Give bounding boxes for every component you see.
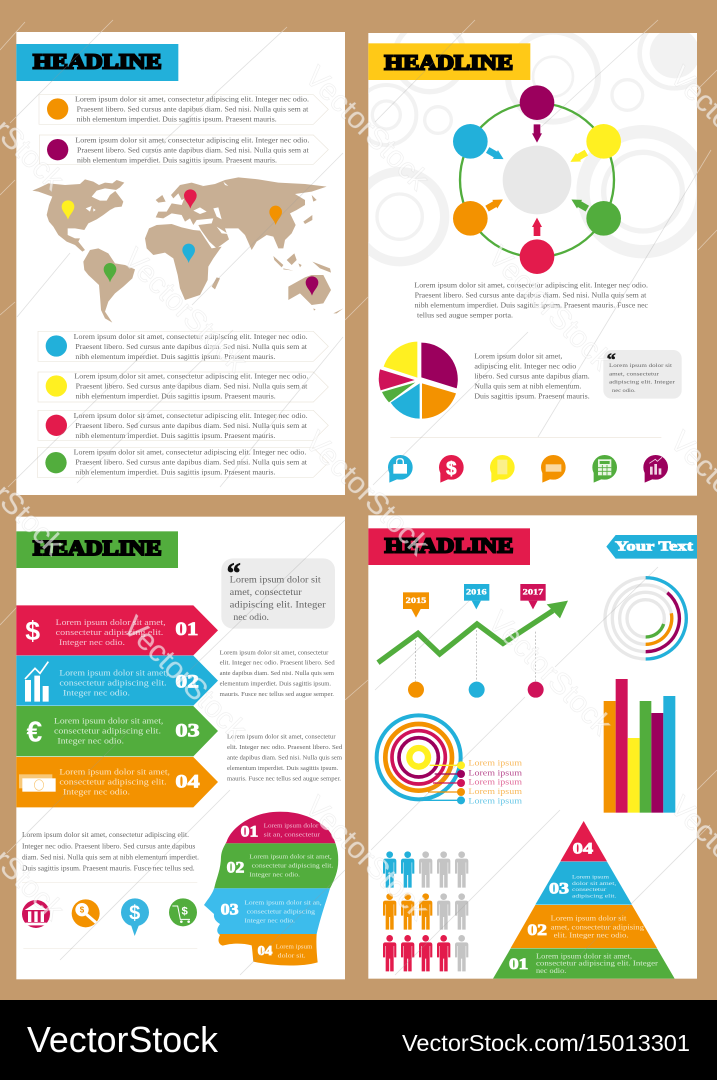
text block: pie description: Nulla quis sem at nibh elementum. [474, 382, 582, 390]
chart: bars [604, 679, 675, 813]
watermark text: VectorStock [298, 425, 436, 562]
arrow banner 02: consectetur adipiscing elit. [59, 678, 167, 687]
chart: pyramid: consectetur [572, 887, 606, 893]
arrow banner 04: 04 [175, 772, 200, 793]
text block: left description: diam. Sed nisi. Nulla quis sem at nibh elementum imperdiet. [22, 854, 199, 862]
chart: concentric target with legend: Lorem ipsum [468, 767, 522, 777]
arrow banner 02 [16, 656, 218, 706]
icon: magnifier with dollar [72, 899, 100, 927]
icon: calculator [592, 455, 617, 483]
callout: yellow item [38, 372, 328, 402]
callout: orange item: Lorem ipsum dolor sit amet, consectetur adipiscing elit. Integer nec odio. [75, 96, 309, 104]
chart: head silhouette: dolor sit. [278, 953, 306, 959]
callout: quote box: “ [607, 350, 616, 370]
callout: quote box: Lorem ipsum dolor sit [609, 363, 673, 369]
arrow banner 04: consectetur adipiscing elit. [59, 778, 167, 787]
arrow banner 03 [16, 706, 218, 756]
callout: purple item: nibh elementum imperdiet. Duis sagittis ipsum. Praesent mauris. [77, 156, 277, 164]
chart: head silhouette: Lorem ipsum [276, 945, 313, 951]
chart: pyramid: adipiscing elit. [572, 893, 617, 899]
chart: head silhouette: 02 [227, 859, 244, 876]
callout: quote box: nec odio. [233, 612, 269, 622]
text block: left description [22, 831, 199, 873]
chart: head silhouette: Lorem ipsum dolor [264, 824, 318, 830]
arrow banner 02: Integer nec odio. [63, 688, 130, 697]
icon: bank [22, 900, 50, 928]
callout: green item: nibh elementum imperdiet. Duis sagittis ipsum. Praesent mauris. [75, 469, 276, 477]
arrow banner 04: Integer nec odio. [63, 788, 130, 797]
icon: shopping bag [388, 455, 413, 483]
chart: concentric target with legend: Lorem ipsum [468, 796, 522, 806]
watermark text: VectorStock [116, 242, 254, 379]
chart: head silhouette: Integer nec odio. [249, 872, 301, 878]
heading: yellow headline: HEADLINE [384, 50, 513, 74]
callout: quote box: adipiscing elit. Integer [230, 600, 326, 610]
text block: pie description: adipiscing elit. Integer nec odio [474, 363, 577, 371]
watermark text: VectorStock [298, 60, 436, 197]
icon: ticket [541, 455, 566, 483]
callout: orange item: nibh elementum imperdiet. Duis sagittis ipsum. Praesent mauris. [77, 116, 277, 124]
text block: right upper: elit. Integer nec odio. Praesent libero. Sed [220, 661, 335, 667]
chart: pyramid: elit. Integer nec odio. [554, 932, 629, 940]
chart: head silhouette: 04 [258, 943, 273, 958]
chart: head silhouette: consectetur adipiscing [247, 909, 315, 915]
text block: cycle description: Praesent libero. Sed cursus ante dapibus diam. Sed nisi. Nulla quis sem at [415, 291, 646, 299]
chart: pyramid: 04 [573, 840, 593, 857]
watermark text: VectorStock [481, 605, 619, 742]
callout: blue item: Praesent libero. Sed cursus ante dapibus diam. Sed nisi. Nulla quis sem at [75, 343, 307, 351]
chart: pyramid: 03 [549, 880, 569, 897]
heading: blue headline: HEADLINE [33, 49, 162, 73]
chart: head silhouette [204, 812, 338, 966]
callout: quote box [603, 350, 682, 399]
callout: green item [37, 448, 328, 477]
chart: timeline line arrow: 2016 [466, 588, 487, 597]
chart: head silhouette: Lorem ipsum dolor sit amet, [249, 854, 332, 860]
chart: timeline line arrow [378, 584, 568, 698]
arrow banner 02: Lorem ipsum dolor sit amet, [59, 668, 168, 677]
text block: right lower [227, 735, 342, 782]
decorative rings [368, 33, 697, 266]
heading: crimson headline [368, 528, 530, 565]
chart: timeline line arrow: 2017 [523, 588, 543, 597]
text block: cycle description [414, 281, 648, 319]
text block: left description: Integer nec odio. Praesent libero. Sed cursus ante dapibus [22, 842, 196, 850]
heading: yellow headline [368, 43, 530, 80]
chart: pyramid: Lorem ipsum [572, 875, 610, 881]
chart: concentric target with legend: Lorem ipsum [468, 758, 522, 768]
text block: pie description [474, 353, 590, 400]
text block: right lower: mauris. Fusce nec tellus sed augue semper. [227, 776, 342, 782]
callout: blue item [38, 331, 328, 361]
text block: right lower: elit. Integer nec odio. Praesent libero. Sed [227, 745, 342, 751]
callout: green item: Lorem ipsum dolor sit amet, consectetur adipiscing elit. Integer nec odio. [74, 449, 307, 457]
callout: yellow item: Lorem ipsum dolor sit amet, consectetur adipiscing elit. Integer nec odio. [74, 373, 309, 381]
panel: numbered arrows page [16, 517, 345, 979]
arrow banner 01 [16, 605, 218, 655]
arrow banner 03: Lorem ipsum dolor sit amet, [54, 717, 163, 726]
callout: blue item: Lorem ipsum dolor sit amet, consectetur adipiscing elit. Integer nec odio. [74, 333, 308, 341]
panel: charts page [368, 515, 697, 979]
icon: document [490, 455, 515, 483]
chart: pyramid: nec odio. [536, 967, 567, 975]
chart: world map with pins [32, 177, 343, 323]
callout: purple item [39, 135, 328, 164]
chart: concentric target with legend: Lorem ipsum [468, 786, 522, 796]
icon: dollar [439, 455, 464, 483]
heading: crimson headline: HEADLINE [385, 533, 513, 557]
text block: cycle description: nibh elementum imperdiet. Duis sagittis ipsum. Praesent mauris. Fusce nec [415, 301, 648, 309]
text block: pie description: libero. Sed cursus ante dapibus diam. [474, 372, 590, 380]
watermark text: VectorStock [298, 790, 436, 927]
footer bar [0, 1000, 717, 1080]
text block: right lower: ante dapibus diam. Sed nisi. Nulla quis sem [227, 756, 342, 762]
chart: pyramid: 02 [527, 922, 547, 939]
callout: crimson item: nibh elementum imperdiet. Duis sagittis ipsum. Praesent mauris. [75, 432, 276, 440]
chart: pyramid [493, 821, 675, 979]
arrow banner 03: 03 [175, 721, 200, 742]
arrow banner 01: 01 [175, 619, 198, 640]
chart: concentric target with legend [377, 715, 522, 806]
banner: your text: Your Text [615, 540, 693, 555]
footer bar: VectorStock.com/15013301 [402, 1030, 690, 1056]
arrow banner 02: 02 [175, 671, 199, 692]
arrow banner 01: $ [25, 616, 40, 646]
callout: yellow item: nibh elementum imperdiet. Duis sagittis ipsum. Praesent mauris. [76, 393, 276, 401]
arrow banner 04 [16, 757, 218, 807]
text block: left description: Duis sagittis ipsum. Praesent mauris. Fusce nec tellus sed. [22, 865, 195, 873]
text block: right lower: Lorem ipsum dolor sit amet, consectetur [227, 735, 336, 741]
chart: pyramid: 01 [509, 956, 529, 973]
text block: pie description: Lorem ipsum dolor sit amet, [474, 353, 563, 361]
footer bar: VectorStock [27, 1019, 219, 1060]
chart: pie [379, 342, 458, 419]
callout: quote box: amet, consectetur [230, 587, 302, 597]
text block: right lower: elementum imperdiet. Duis sagittis ipsum. [227, 766, 339, 772]
arrow banner 01: consectetur adipiscing elit. [56, 628, 163, 637]
chart: head silhouette: sit an, consectetur [264, 833, 320, 839]
icon: magnifier with dollar: $ [80, 906, 85, 915]
arrow banner 04: Lorem ipsum dolor sit amet, [59, 768, 170, 777]
chart: concentric target with legend: Lorem ipsum [468, 777, 522, 787]
callout: quote box: nec odio. [612, 388, 636, 394]
banner: your text [606, 535, 697, 559]
chart: head silhouette: 03 [221, 901, 239, 918]
icon: dollar pin [121, 898, 149, 936]
watermark text: VectorStock [116, 610, 254, 747]
callout: quote box: “ [227, 559, 241, 590]
chart: people pictogram [383, 851, 468, 971]
callout: crimson item [38, 410, 328, 440]
text block: right upper [220, 650, 335, 698]
chart: cycle of six nodes [453, 85, 621, 274]
text block: cycle description: tellus sed augue semper porta. [417, 311, 513, 319]
chart: pyramid: amet, consectetur adipising [551, 924, 645, 932]
callout: purple item: Praesent libero. Sed cursus ante dapibus diam. Sed nisi. Nulla quis sem at [77, 146, 309, 154]
chart: head silhouette: Lorem ipsum dolor sit an, [244, 900, 322, 906]
callout: orange item: Praesent libero. Sed cursus ante dapibus diam. Sed nisi. Nulla quis sem at [77, 106, 308, 114]
heading: green headline: HEADLINE [33, 536, 162, 560]
chart: head silhouette: Integer nec odio. [244, 918, 296, 924]
panel: world map page [16, 32, 345, 495]
callout: crimson item: Lorem ipsum dolor sit amet, consectetur adipiscing elit. Integer nec odio. [74, 412, 308, 420]
text block: pie description: Duis sagittis ipsum. Praesent mauris. [474, 392, 590, 400]
callout: green item: Praesent libero. Sed cursus ante dapibus diam. Sed nisi. Nulla quis sem at [75, 459, 307, 467]
text block: left description: Lorem ipsum dolor sit amet, consectetur adipiscing elit. [22, 831, 189, 839]
arrow banner 01: Lorem ipsum dolor sit amet, [56, 618, 166, 627]
icon: dollar pin: $ [129, 902, 140, 924]
text block: right upper: elementum imperdiet. Duis sagittis ipsum. [220, 682, 332, 688]
callout: quote box [221, 558, 335, 629]
heading: green headline [16, 531, 178, 568]
callout: quote box: amet, consectetur [609, 371, 659, 377]
chart: head silhouette: consectetur adipiscing elit. [252, 863, 334, 869]
chart: pyramid: Lorem ipsum dolor sit amet, [536, 952, 632, 960]
callout: quote box: adipiscing elit. Integer [609, 380, 675, 386]
callout: purple item: Lorem ipsum dolor sit amet, consectetur adipiscing elit. Integer nec odio. [75, 136, 310, 144]
chart: pyramid: Lorem ipsum dolor sit [551, 914, 626, 922]
chart: timeline line arrow: 2015 [406, 596, 426, 605]
icon: cart with dollar: $ [182, 906, 189, 918]
callout: orange item [39, 95, 328, 124]
text block: cycle description: Lorem ipsum dolor sit amet, consectetur adipiscing elit. Integer nec odio. [414, 281, 648, 289]
chart: head silhouette: 01 [241, 824, 258, 841]
callout: blue item: nibh elementum imperdiet. Duis sagittis ipsum. Praesent mauris. [75, 353, 276, 361]
chart: pyramid: dolor sit amet, [572, 881, 617, 887]
watermark text: VectorStock [481, 240, 619, 377]
arrow banner 03: € [26, 717, 42, 749]
text block: right upper: ante dapibus diam. Sed nisi. Nulla quis sem [220, 671, 334, 677]
text block: right upper: Lorem ipsum dolor sit amet, consectetur [220, 650, 328, 656]
heading: blue headline [16, 44, 178, 81]
icon: dollar: $ [446, 458, 457, 479]
callout: quote box: Lorem ipsum dolor sit [230, 575, 321, 585]
arrow banner 03: consectetur adipiscing elit. [54, 727, 161, 736]
arrow banner 01: Integer nec odio. [59, 638, 125, 647]
chart: pyramid: consectetur adipiscing elit. Integer [536, 960, 659, 968]
chart: radial progress [605, 578, 686, 659]
panel: cycle diagram page [368, 33, 697, 496]
arrow banner 03: Integer nec odio. [57, 737, 124, 746]
text block: right upper: mauris. Fusce nec tellus sed augue semper. [220, 692, 335, 698]
callout: crimson item: Praesent libero. Sed cursus ante dapibus diam. Sed nisi. Nulla quis sem at [75, 422, 307, 430]
callout: yellow item: Praesent libero. Sed cursus ante dapibus diam. Sed nisi. Nulla quis sem at [76, 383, 307, 391]
icon: cart with dollar [169, 898, 197, 926]
icon: bar chart [643, 455, 668, 483]
